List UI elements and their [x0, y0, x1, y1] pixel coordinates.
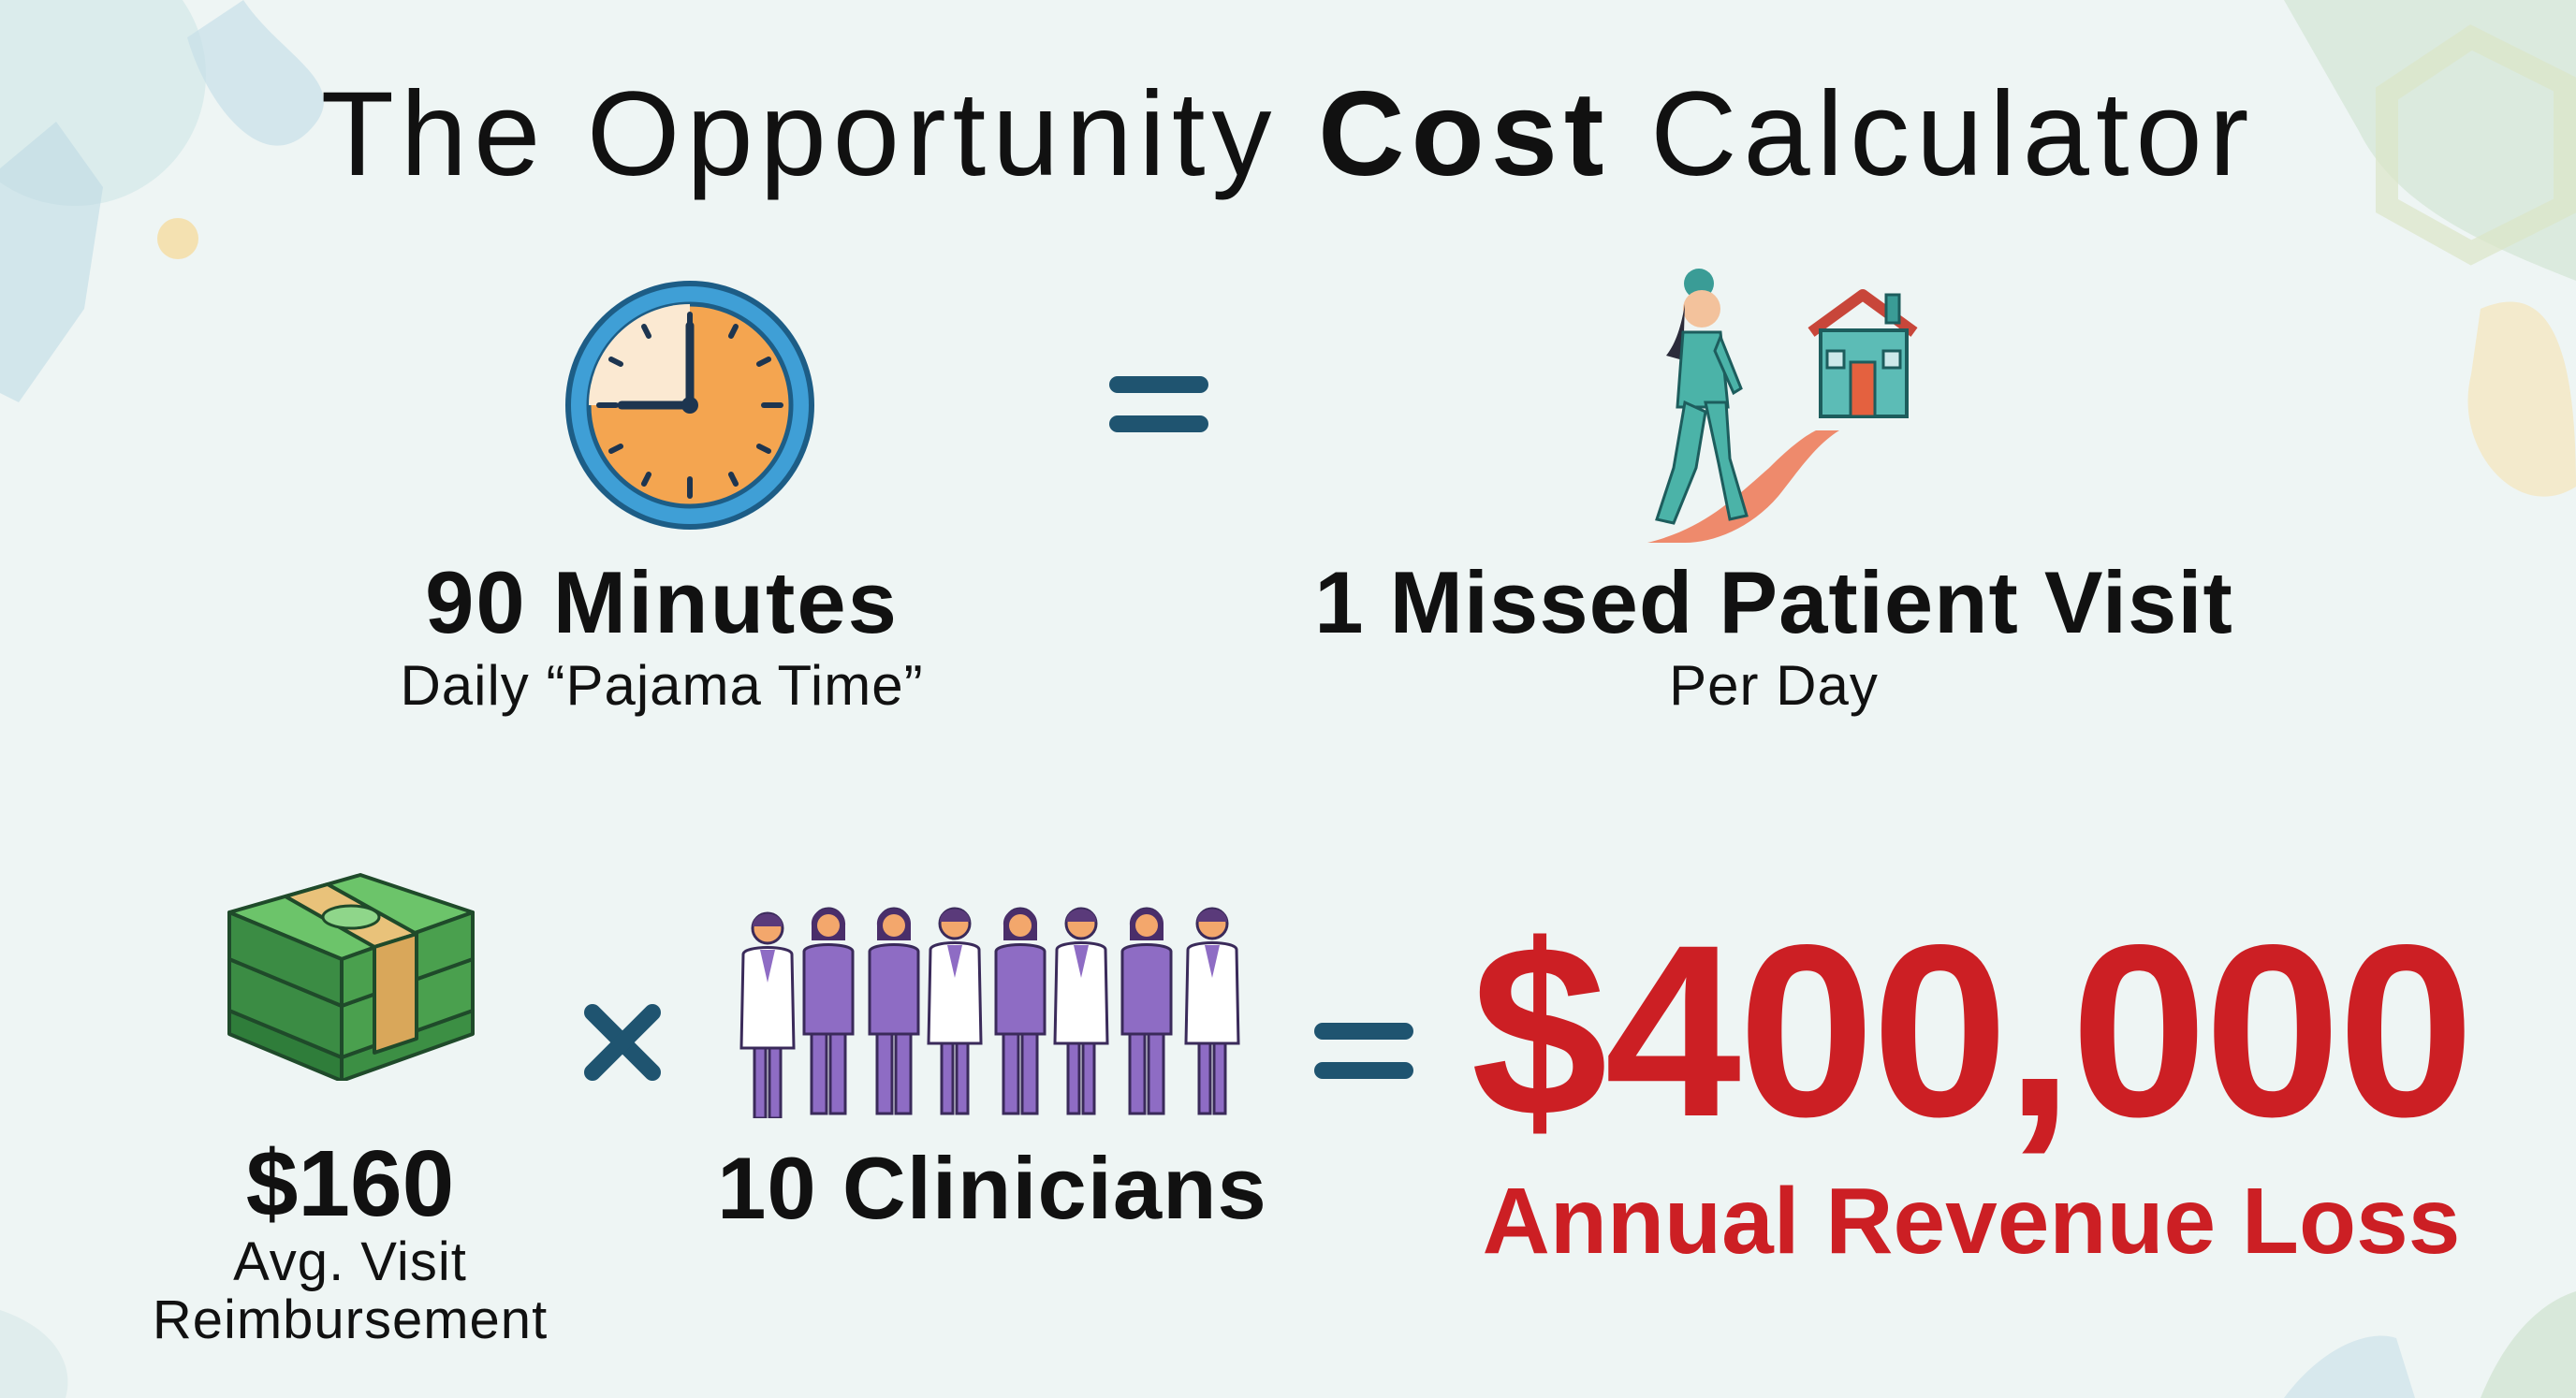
text: avg visit reimbursement: Avg. Visit [233, 1231, 467, 1292]
text: 90 minutes: 90 Minutes [425, 553, 899, 651]
title: The Opportunity Cost Calculator [321, 67, 2255, 201]
text: per day: Per Day [1669, 654, 1879, 717]
icon: money stack [227, 873, 476, 1081]
text: 10 clinicians: 10 Clinicians [717, 1139, 1267, 1237]
text: $160: $160 [246, 1131, 454, 1236]
equals sign 2 [1314, 1023, 1413, 1079]
icon: nurse walking home [1647, 269, 1917, 543]
icon: clinicians group [739, 908, 1240, 1118]
text: annual revenue loss: Annual Revenue Loss [1483, 1169, 2460, 1274]
icon: clock [565, 281, 814, 530]
equals sign 1 [1109, 376, 1208, 432]
text: avg visit reimbursement: Reimbursement [153, 1289, 548, 1350]
text: $400,000: $400,000 [1471, 894, 2471, 1168]
text: daily pajama time: Daily “Pajama Time” [400, 654, 924, 717]
multiply sign [584, 1004, 661, 1081]
text: 1 missed patient visit: 1 Missed Patient Visit [1314, 553, 2233, 651]
text: avg visit reimbursement [153, 1231, 548, 1350]
